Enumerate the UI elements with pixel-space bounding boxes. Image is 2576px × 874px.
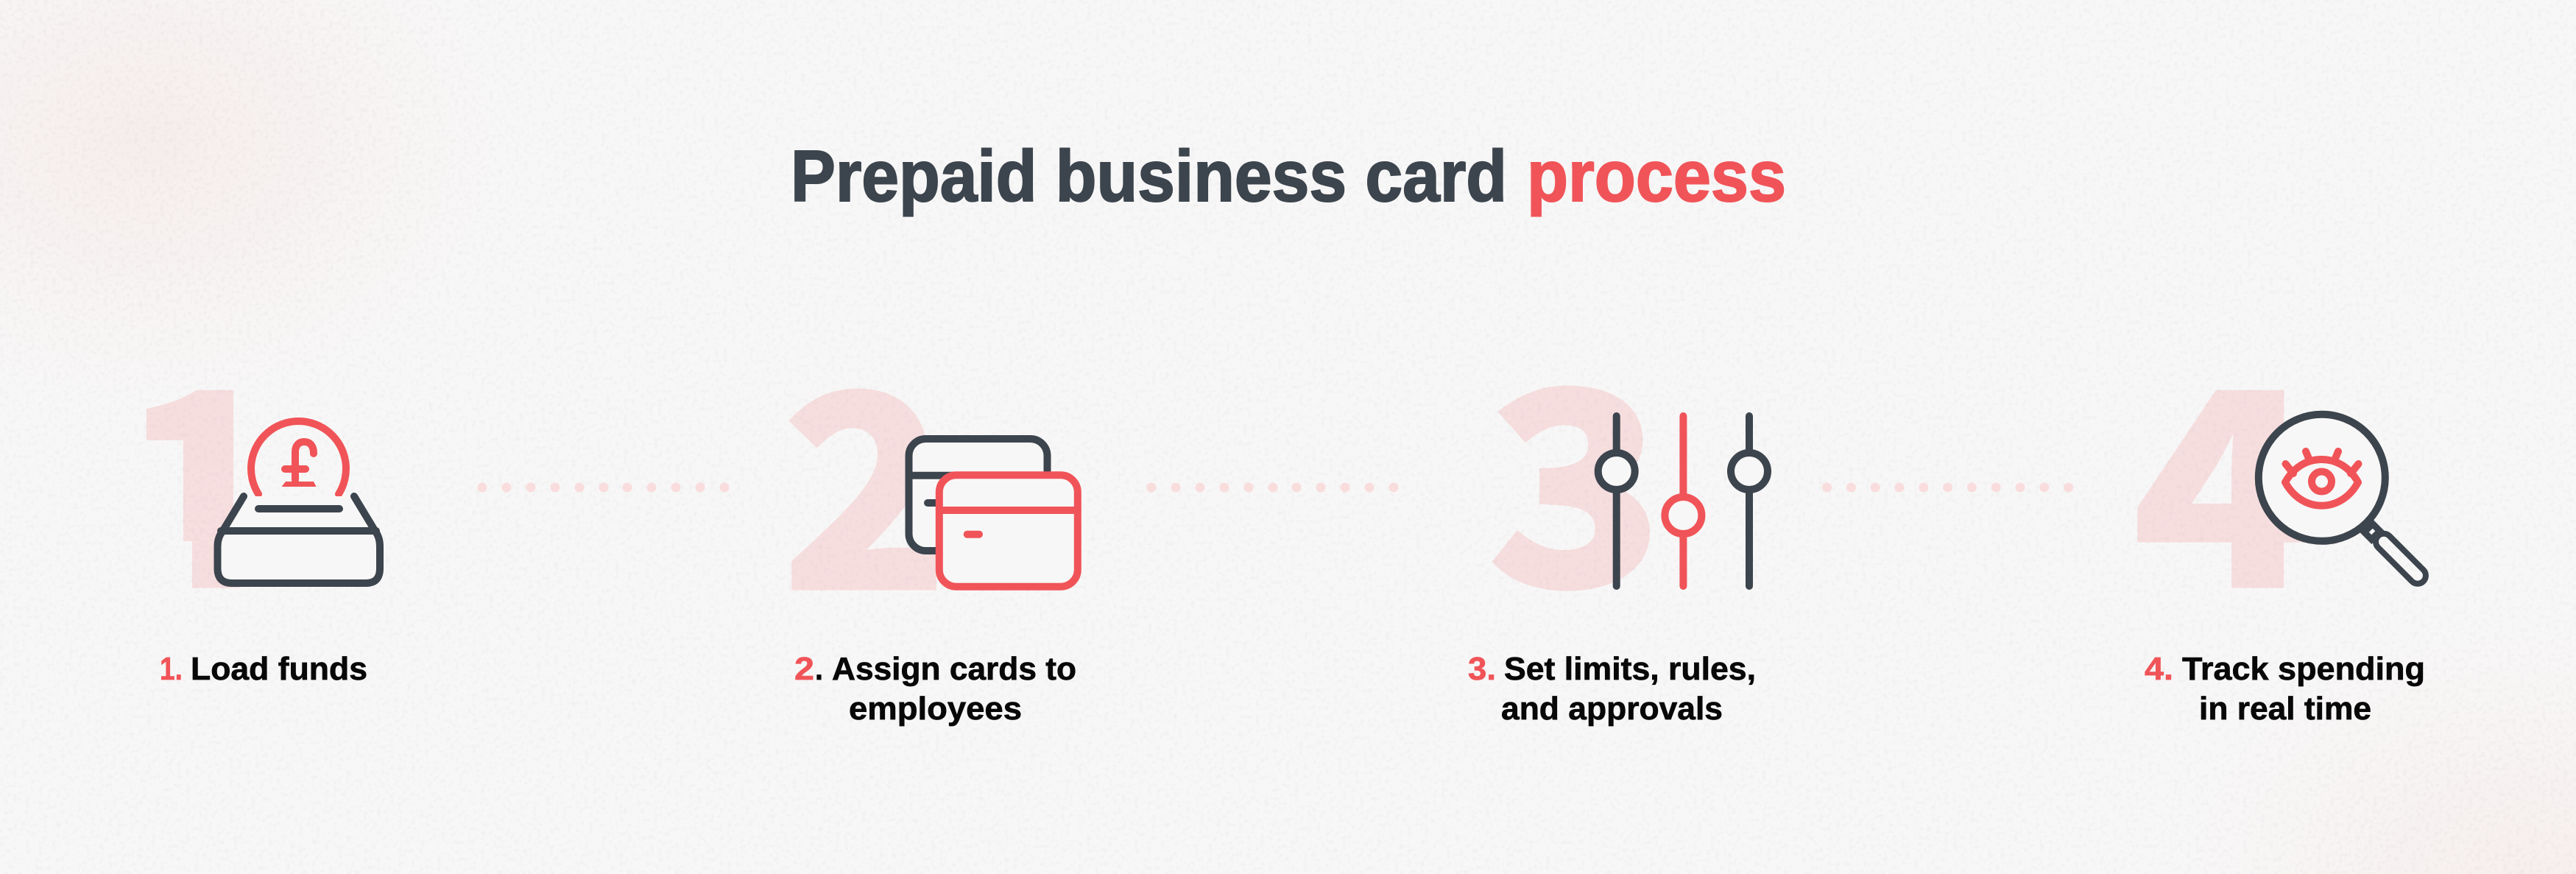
- step 2 label: [794, 651, 1076, 727]
- step 3 label: and approvals: [1501, 691, 1723, 727]
- step 3: set limits: [1468, 275, 1768, 727]
- step 3 label: [1468, 651, 1756, 727]
- step 2 label: Assign cards to: [832, 651, 1076, 687]
- icon: two payment cards: [908, 439, 1078, 587]
- step 4: track spending: [2132, 274, 2429, 727]
- large background numeral 1: 1: [121, 275, 285, 665]
- step 4 label: in real time: [2199, 691, 2371, 727]
- title: process: [1527, 135, 1786, 216]
- connector dots 1 to 2: [477, 483, 729, 492]
- step 3 label: 3.: [1468, 651, 1496, 687]
- step 1: load funds: [146, 390, 384, 680]
- large background numeral 2: 2: [781, 276, 949, 667]
- step 3 label: Set limits, rules,: [1504, 651, 1756, 687]
- step 2: assign cards: [781, 276, 1078, 727]
- step 4 label: 4.: [2145, 651, 2173, 687]
- icon: three sliders: [1598, 416, 1768, 586]
- step 2 label: 2: [794, 651, 814, 687]
- icon: coin dropping into box: [218, 421, 380, 583]
- connector dots 3 to 4: [1822, 483, 2073, 492]
- title: Prepaid business card: [791, 135, 1507, 216]
- step 1 label: Load funds: [191, 651, 367, 687]
- large background numeral 4: 4: [2132, 274, 2315, 665]
- step 4 label: [2145, 651, 2425, 727]
- step 1 label: 1.: [160, 651, 183, 687]
- step 2 label: employees: [849, 691, 1022, 727]
- step 2 label: .: [815, 651, 823, 687]
- connector dots 2 to 3: [1147, 483, 1399, 492]
- large background numeral 3: 3: [1486, 275, 1665, 664]
- icon: magnifier with eye: [2259, 415, 2429, 587]
- step 4 label: Track spending: [2182, 651, 2425, 687]
